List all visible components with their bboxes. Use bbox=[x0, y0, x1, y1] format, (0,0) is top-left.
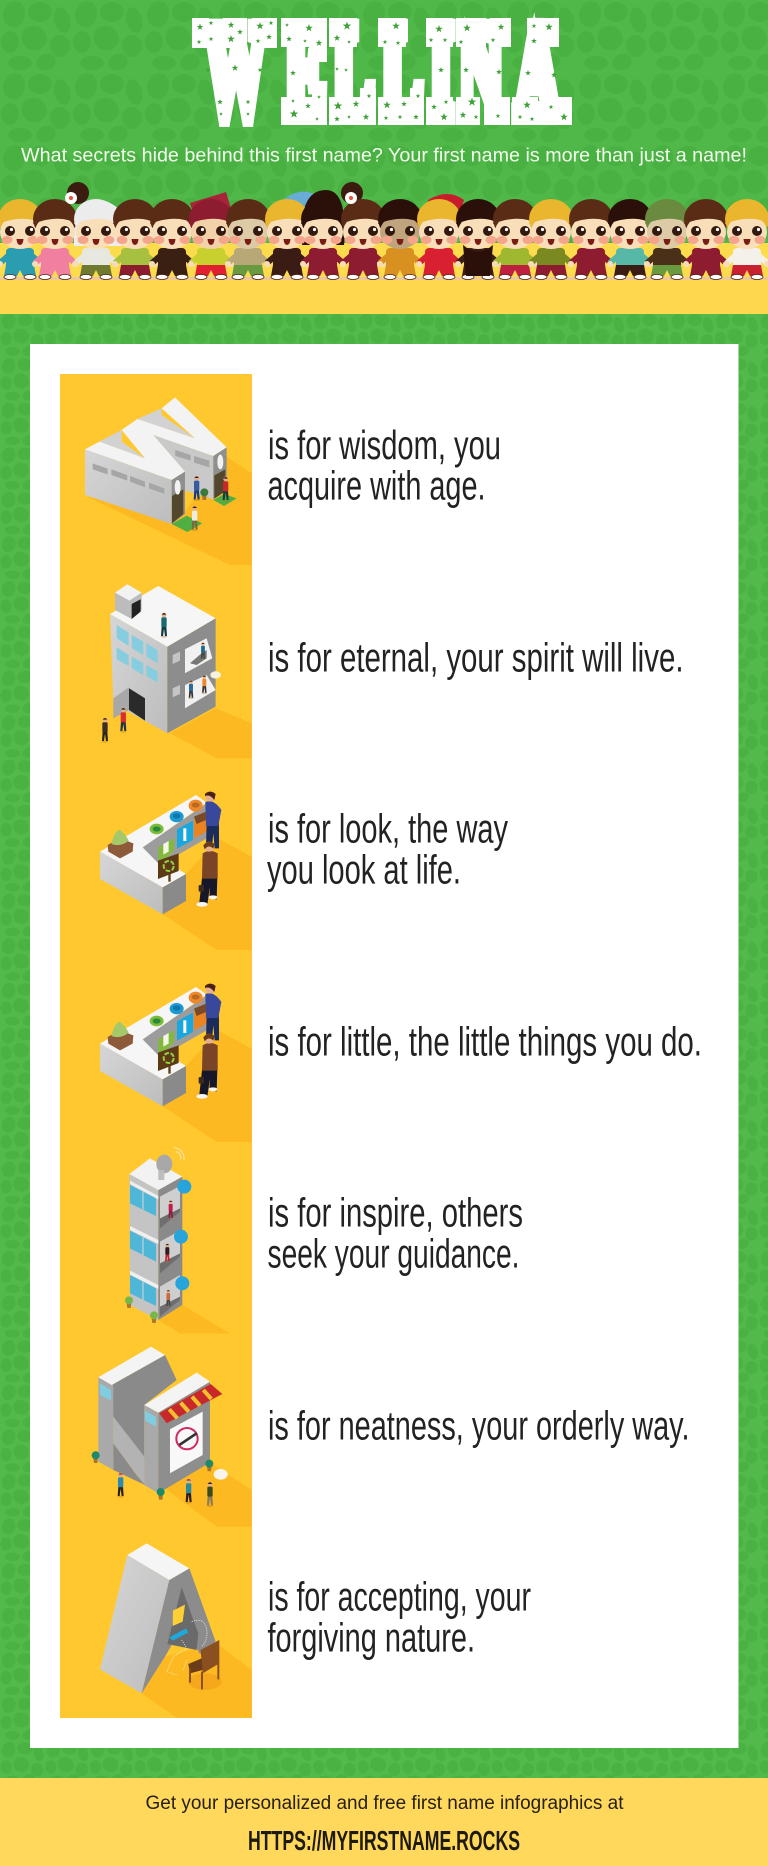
icon: A building bbox=[100, 1543, 252, 1718]
footer URL: HTTPS://MYFIRSTNAME.ROCKS bbox=[248, 1825, 520, 1856]
yellow band behind characters bbox=[0, 243, 768, 314]
icon: I tower bbox=[125, 1147, 230, 1333]
text: L line 1: you look at life. bbox=[267, 846, 461, 892]
text: I line: is for inspire, others bbox=[268, 1190, 523, 1236]
text: W line bbox=[268, 422, 501, 508]
text: A line: forgiving nature. bbox=[268, 1615, 475, 1661]
text: I line: seek your guidance. bbox=[268, 1231, 520, 1277]
text: L line 1: is for look, the way bbox=[268, 806, 508, 852]
text: L line 1 bbox=[267, 806, 508, 892]
text: W line: acquire with age. bbox=[268, 462, 486, 508]
yellow illustration column bbox=[60, 374, 252, 1718]
row of cartoon characters bbox=[0, 182, 768, 280]
icon: E building bbox=[102, 584, 252, 758]
white content panel bbox=[30, 344, 738, 1748]
text: A line bbox=[268, 1574, 531, 1661]
icon: N shop building bbox=[92, 1347, 252, 1527]
icon: second L recycling station bbox=[100, 984, 252, 1142]
footer band bbox=[0, 1778, 768, 1866]
text: A line: is for accepting, your bbox=[268, 1574, 531, 1620]
text: W line: is for wisdom, you bbox=[268, 422, 501, 468]
header title WELLINA: WELLINA bbox=[205, 0, 559, 145]
subtitle: What secrets hide behind this first name? Your first name is more than just a name! bbox=[21, 144, 747, 166]
footer prompt text: Get your personalized and free first name infographics at bbox=[146, 1793, 624, 1814]
text: I line bbox=[268, 1190, 523, 1277]
icon: W building bbox=[85, 397, 252, 565]
icon: L recycling station bbox=[100, 792, 252, 950]
